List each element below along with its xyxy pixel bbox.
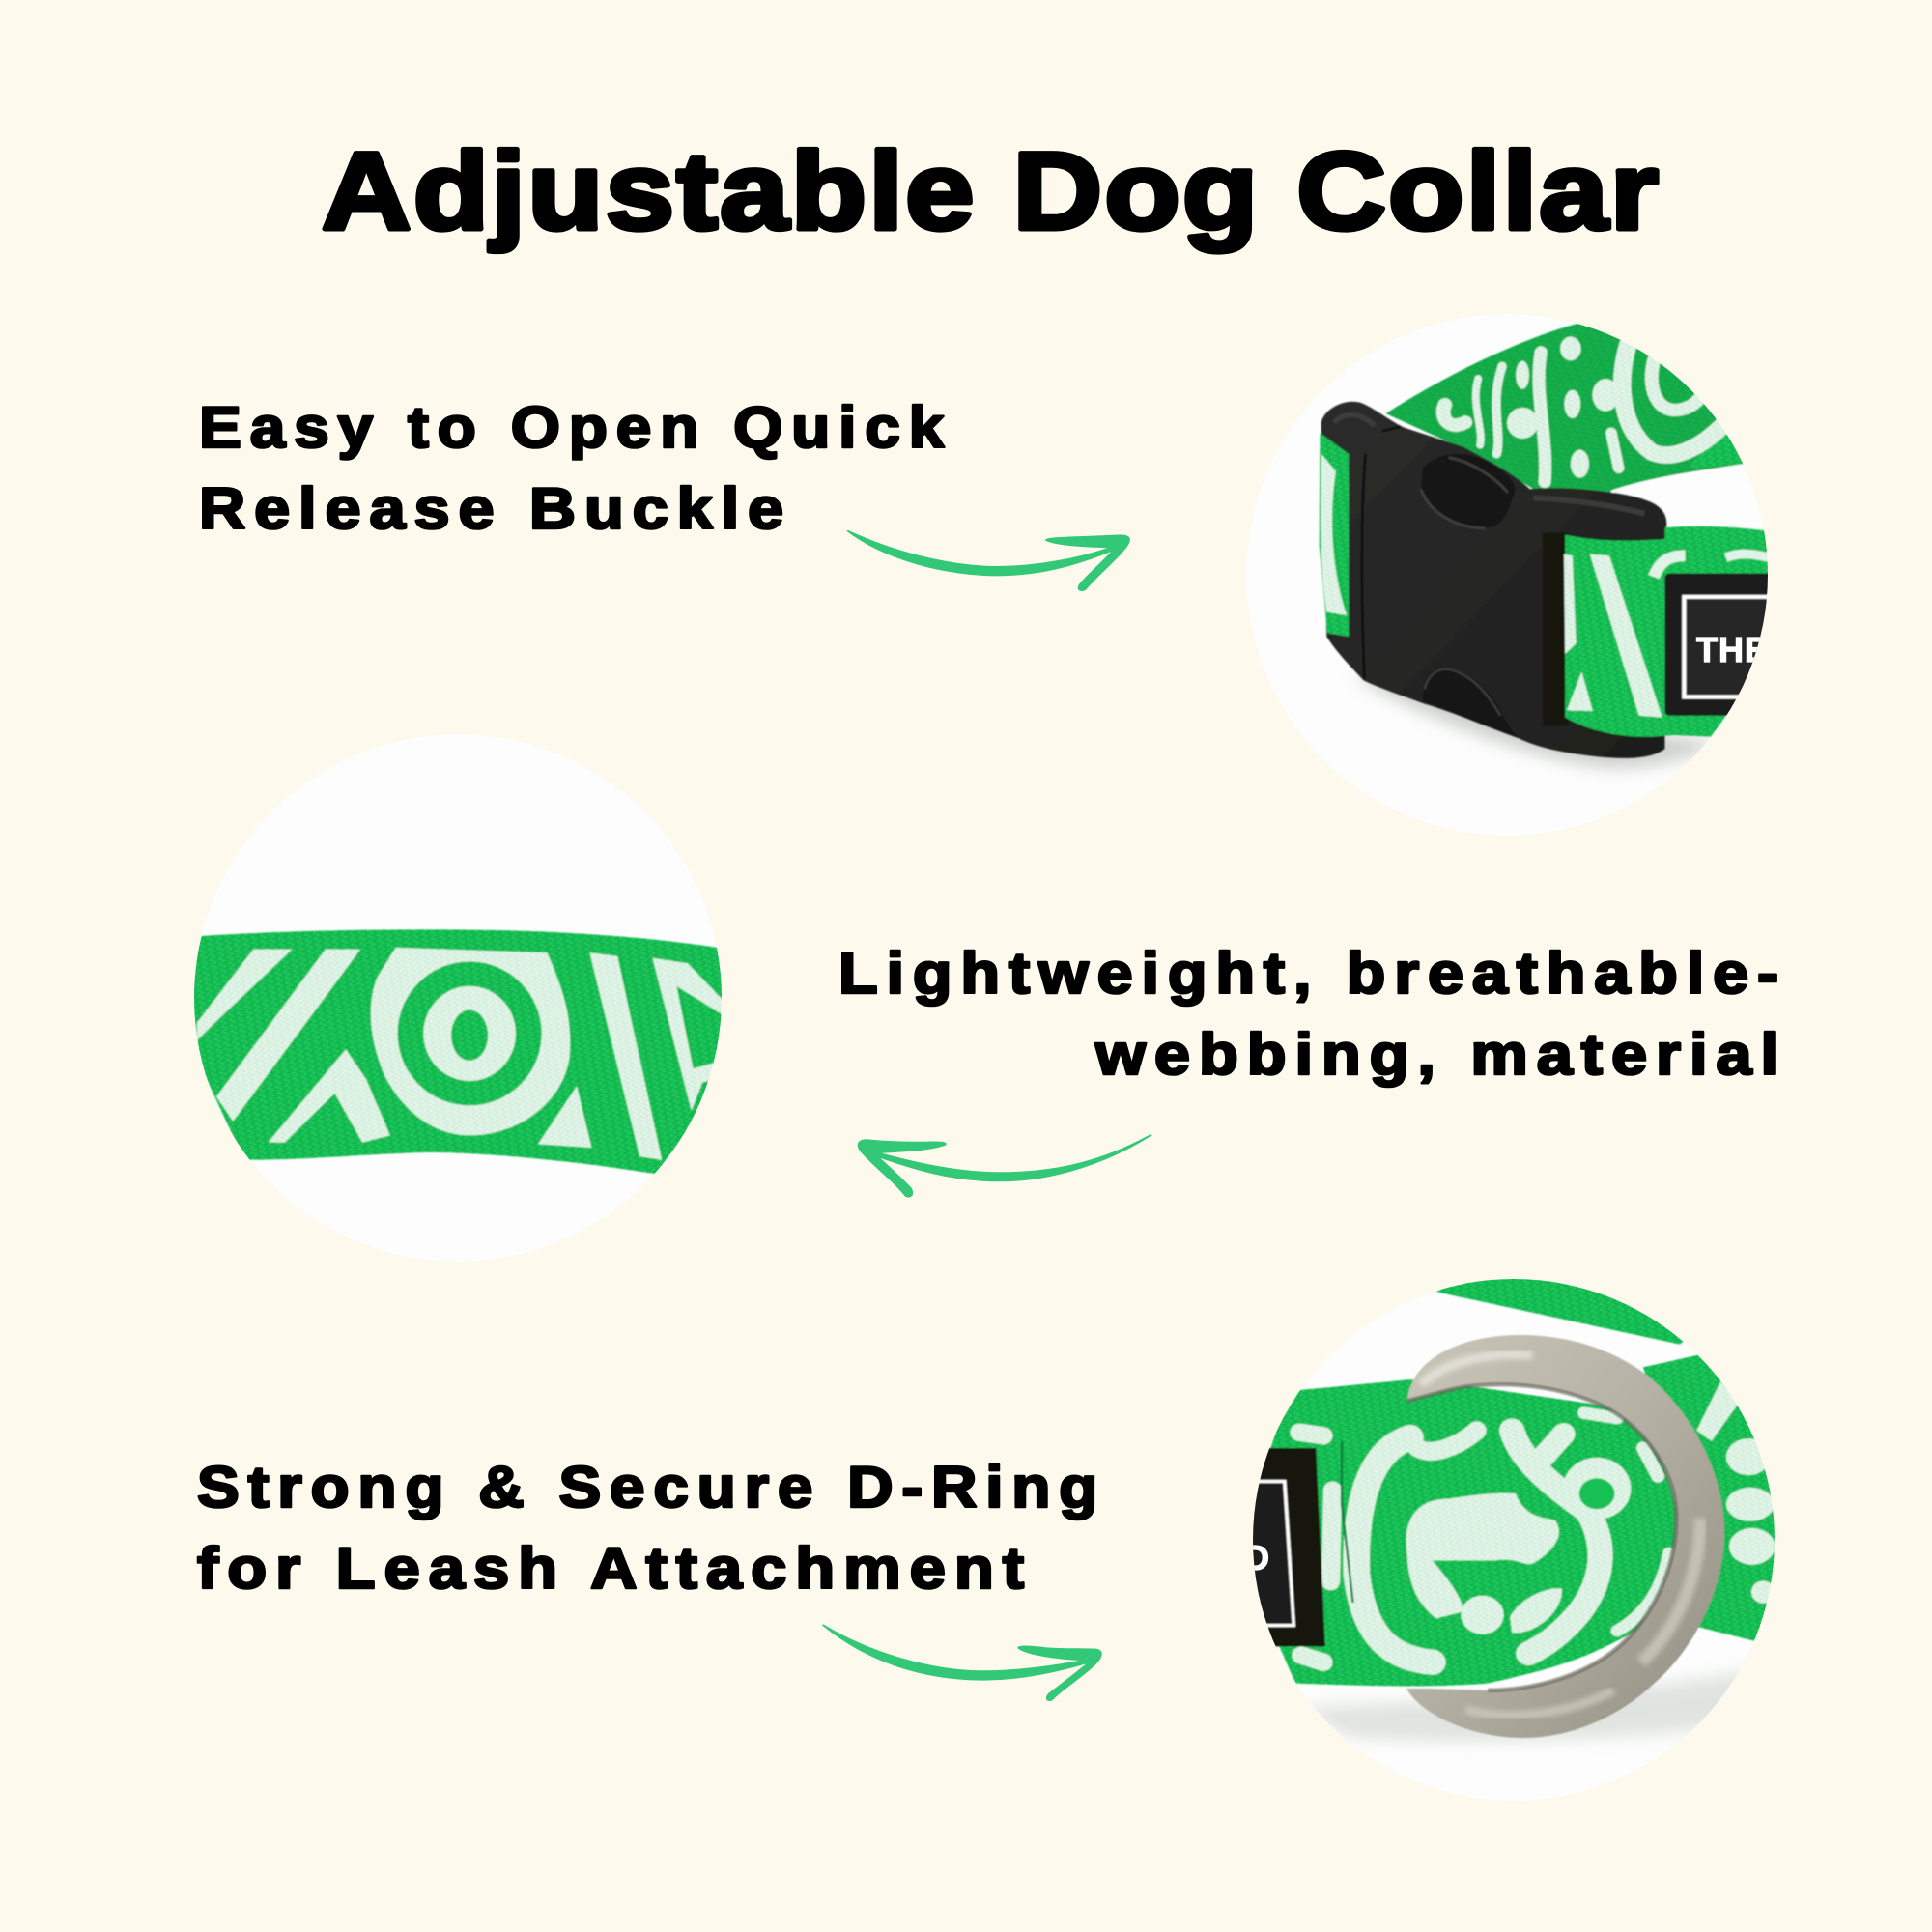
strap seam: [1342, 1441, 1353, 1603]
central print blob: [1406, 1493, 1559, 1618]
feature text: breathable webbing: [838, 941, 1787, 1087]
rear strap top: [1436, 1259, 1724, 1345]
right print shapes: [538, 1086, 591, 1148]
strap main loop: [1251, 1379, 1676, 1686]
strap print: [1299, 1413, 1669, 1662]
feature text: quick release buckle: Release Buckle: [199, 476, 792, 541]
loop strap left: [1320, 433, 1349, 637]
photo circle: webbing material: [188, 734, 728, 1262]
thumb press: [1421, 454, 1515, 527]
arrow: points to webbing photo: [859, 1135, 1151, 1197]
strap behind ring: [1643, 1353, 1783, 1648]
surface shadow: [1352, 675, 1715, 768]
photo circle: quick release buckle: [1246, 314, 1787, 836]
strap: [188, 929, 728, 1174]
buckle highlights: [1534, 497, 1644, 514]
feature text: quick release buckle: Easy to Open Quick: [199, 395, 952, 460]
feature text: D-ring: for Leash Attachment: [197, 1536, 1033, 1601]
front strap: [1565, 535, 1674, 737]
concentric circle print: [371, 948, 570, 1135]
woven patch: [1664, 574, 1783, 716]
feature text: D-ring: Strong & Secure D-Ring: [197, 1455, 1106, 1520]
back strap print: [1443, 345, 1726, 482]
feature text: breathable webbing: Lightweight, breathable-: [838, 941, 1787, 1006]
back strap: [1386, 323, 1751, 493]
diagonal print bands: [197, 950, 292, 1040]
D-ring metal: [1406, 1335, 1724, 1738]
arrow: points to buckle photo: [848, 531, 1129, 590]
surface shadow: [1299, 1669, 1761, 1741]
title: Adjustable Dog Collar: [322, 130, 1661, 253]
patch letter: D: [1244, 1538, 1269, 1577]
feature text: D-ring: [197, 1455, 1106, 1601]
chevron print: [269, 1049, 390, 1143]
feature text: quick release buckle: [199, 395, 952, 541]
arrow: points to D-ring photo: [823, 1625, 1101, 1700]
buckle notch: [1423, 668, 1519, 738]
photo circle: D-ring: [1244, 1259, 1783, 1801]
patch label: THE: [1696, 630, 1769, 669]
feature text: breathable webbing: webbing, material: [1094, 1022, 1787, 1087]
woven patch: [1260, 1447, 1327, 1648]
strap behind patch: [1664, 526, 1770, 737]
buckle body: [1321, 402, 1666, 758]
